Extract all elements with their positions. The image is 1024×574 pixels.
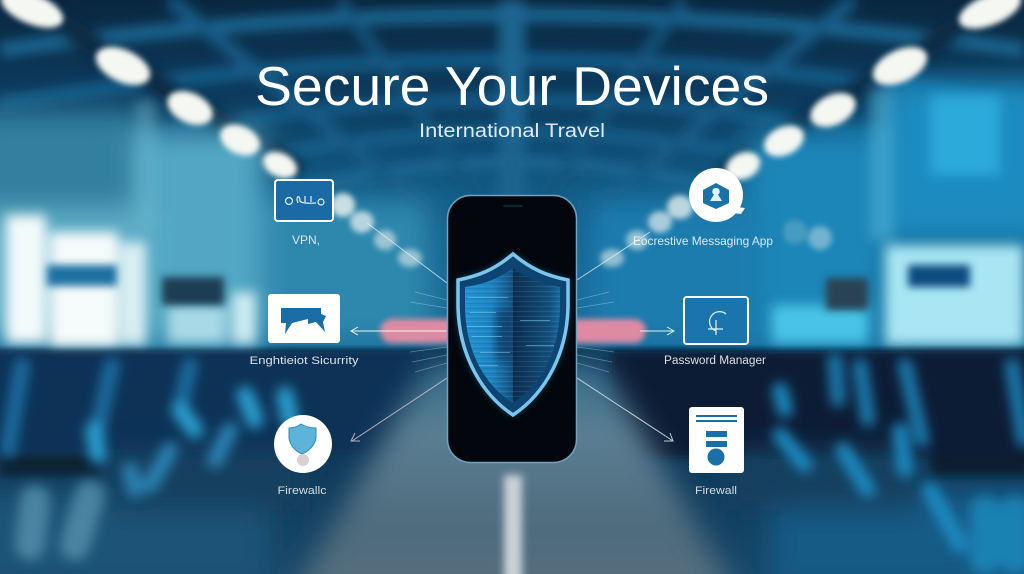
arrow: phone to messaging app	[577, 232, 650, 280]
user hexagon glyph	[703, 183, 729, 209]
left windows	[6, 215, 46, 343]
arrow: phone to left firewall	[351, 378, 447, 441]
title: Secure Your Devices	[255, 55, 769, 117]
subtitle: International Travel	[419, 121, 605, 142]
side halls	[0, 80, 1024, 345]
messaging app badge	[689, 168, 745, 222]
VPN label: VPN,	[292, 233, 320, 247]
light streaks beside phone	[410, 292, 614, 372]
password manager card	[684, 297, 748, 344]
floor	[0, 360, 1024, 574]
ceiling beams	[0, 0, 1024, 220]
pink glow right	[556, 319, 646, 343]
phone	[448, 196, 576, 462]
chair uprights	[8, 360, 1024, 560]
right firewall label: Firewall	[695, 485, 737, 497]
document lines	[696, 415, 737, 466]
messaging app label: Eocrestive Messaging App	[633, 234, 773, 248]
endpoint security label: Enghtieiot Sicurrity	[250, 355, 359, 367]
left firewall label: Firewallc	[278, 485, 327, 497]
VPN glyph	[286, 196, 324, 205]
key glyph	[708, 312, 726, 335]
ceiling lights	[0, 0, 1024, 267]
chat bubble glyph	[281, 308, 326, 334]
arrow: phone to password manager	[640, 327, 674, 335]
grey dot	[297, 454, 309, 466]
phone speaker	[503, 205, 523, 207]
VPN card	[275, 180, 333, 221]
endpoint security card	[268, 294, 340, 343]
password manager label: Password Manager	[664, 355, 766, 367]
arrow: phone to right firewall	[577, 378, 673, 441]
right firewall document	[689, 407, 744, 473]
right windows	[885, 245, 1024, 345]
arrow: phone to endpoint security	[351, 327, 447, 335]
seating blocks	[0, 352, 1024, 477]
shield glyph	[289, 424, 316, 454]
pink glow left	[380, 319, 470, 343]
left firewall badge	[274, 415, 332, 473]
floor reflection	[504, 475, 522, 574]
shield icon	[458, 254, 568, 415]
arrow: phone to VPN	[367, 223, 447, 283]
